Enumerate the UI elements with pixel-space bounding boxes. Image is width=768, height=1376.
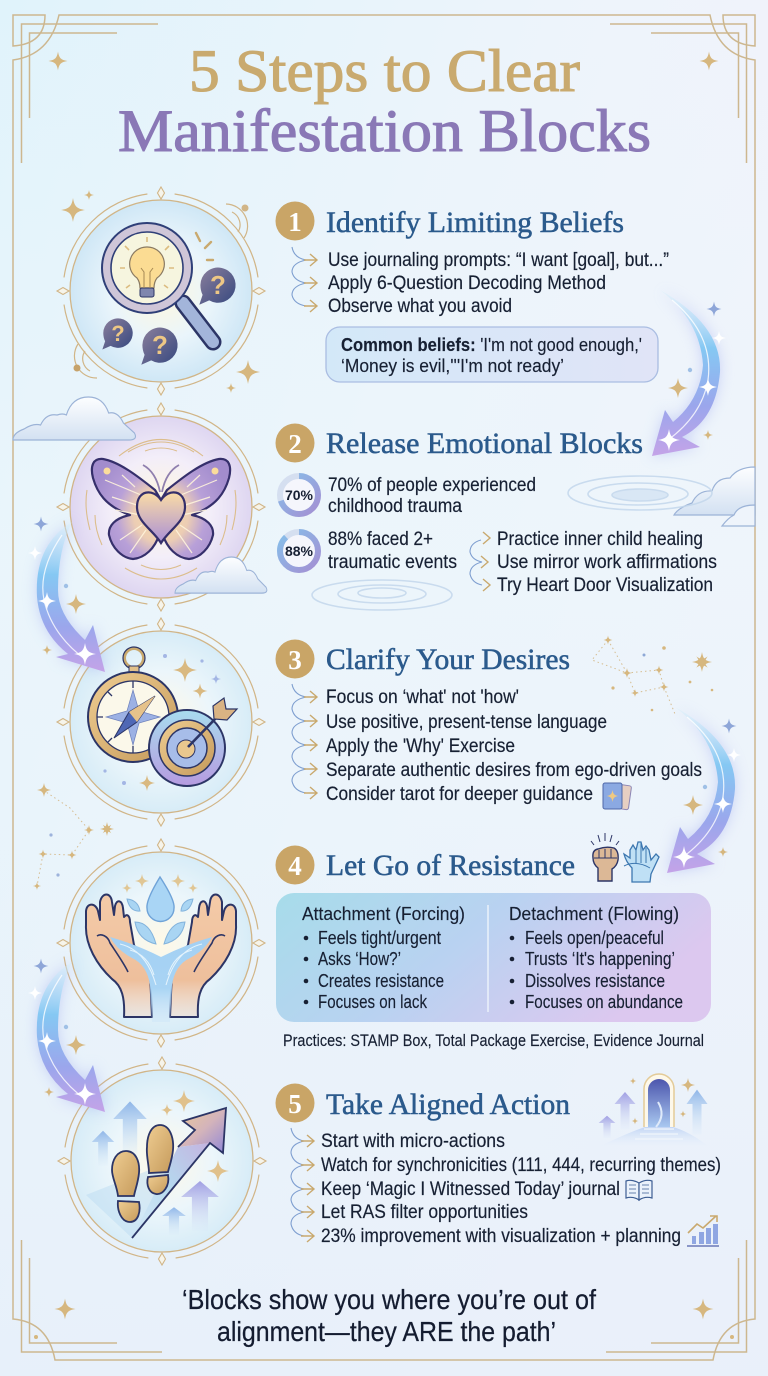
flow arrow: step 3 to 4 — [667, 707, 741, 873]
stat: 70% text: 70% of people experienced — [328, 475, 536, 496]
column: attachment: Focuses on lack — [318, 992, 428, 1012]
illustration: compass and target — [57, 618, 265, 826]
column: attachment: Creates resistance — [318, 971, 444, 991]
connector — [292, 247, 317, 312]
illustration: open hands with water — [57, 839, 265, 1047]
bullet list: Start with micro-actions — [321, 1131, 505, 1152]
badge 4: 4 — [288, 851, 302, 881]
icon: cloud right small — [722, 505, 755, 526]
heading: Take Aligned Action — [326, 1088, 570, 1121]
callout: common beliefs: ‘Money is evil,'''I'm not ready’ — [341, 356, 564, 376]
icon: open hand — [624, 842, 659, 882]
icon: question bubble bottom — [141, 328, 178, 365]
flow arrow: step 2 to 3 — [28, 516, 105, 672]
closing quote: ‘Blocks show you where you’re out of — [182, 1284, 596, 1315]
closing quote — [182, 1284, 596, 1347]
icon: antennae — [143, 465, 179, 492]
clouds over illustrations — [13, 397, 755, 593]
connector — [291, 1128, 314, 1242]
practice list: Use mirror work affirmations — [497, 552, 717, 573]
column: attachment: Asks ‘How?’ — [318, 949, 401, 969]
panel: step 4 — [276, 833, 711, 1050]
comparison panel — [276, 893, 711, 1022]
badge 4 — [276, 846, 314, 884]
bullet list — [321, 1131, 721, 1247]
heading: Identify Limiting Beliefs — [326, 206, 624, 239]
icon: tarot cards — [603, 783, 632, 810]
icon: clenched fist — [591, 833, 619, 881]
bullet list: Consider tarot for deeper guidance — [326, 784, 593, 805]
icon: left hand — [86, 894, 152, 1017]
icon: thumbs — [97, 935, 225, 972]
icon: butterfly left wings — [92, 459, 161, 559]
icon: heart — [137, 492, 185, 543]
constellation upper right — [592, 636, 713, 714]
bullet list: Apply the 'Why' Exercise — [326, 736, 515, 757]
practice list — [497, 529, 717, 596]
icon: droplets — [127, 899, 193, 944]
icon: magnifier handle highlight — [183, 303, 213, 342]
connector — [292, 684, 317, 799]
column: attachment: Attachment (Forcing) — [302, 904, 465, 924]
panel: step 3 — [276, 640, 702, 810]
icon: right hand — [170, 894, 236, 1017]
icon: magnifier lens — [111, 232, 183, 304]
bullet list: 23% improvement with visualization + planning — [321, 1226, 681, 1247]
icon: lightbulb — [120, 237, 174, 297]
icon: cloud right — [674, 467, 755, 515]
bullet list: Apply 6-Question Decoding Method — [328, 273, 606, 294]
bullet list: Observe what you avoid — [328, 296, 512, 317]
icon: rising arrow outline — [132, 1108, 226, 1238]
column: attachment: Feels tight/urgent — [318, 928, 441, 948]
stat: 88% text: traumatic events — [328, 552, 457, 573]
badge 5 — [276, 1084, 314, 1122]
bullet list — [328, 250, 669, 317]
icon: flowing water — [110, 937, 212, 1022]
water ripples right — [568, 476, 712, 510]
bullet list: Watch for synchronicities (111, 444, recurring themes) — [321, 1155, 721, 1176]
donut: 88% — [280, 532, 318, 570]
column: detachment: Focuses on abundance — [525, 992, 683, 1012]
stat: 70% text: childhood trauma — [328, 496, 462, 517]
illustration: butterfly with heart — [57, 403, 265, 611]
energy arcs — [86, 440, 236, 579]
stat: 70% text — [328, 475, 536, 517]
practice list: Try Heart Door Visualization — [497, 575, 713, 596]
heading: Release Emotional Blocks — [326, 427, 643, 460]
title: Manifestation Blocks — [118, 98, 651, 164]
callout: common beliefs: Common beliefs: 'I'm not good enough,' — [341, 335, 642, 355]
illustration: footsteps and rising arrow — [58, 1057, 266, 1265]
practices line: Practices: STAMP Box, Total Package Exercise, Evidence Journal — [283, 1032, 704, 1050]
icon: water highlights — [120, 944, 202, 985]
icon: footprint one — [112, 1151, 140, 1222]
practice list: Practice inner child healing — [497, 529, 703, 550]
icon: sparkle lines — [196, 233, 213, 260]
illustration: magnifier with lightbulb — [57, 187, 265, 395]
column: detachment: Feels open/peaceful — [525, 928, 664, 948]
panel: step 5 — [276, 1074, 721, 1247]
icon: rising arrow head — [178, 1108, 226, 1153]
icon: magnifier rim — [102, 223, 192, 313]
icon: footprint two — [147, 1125, 173, 1194]
bullet list: Use journaling prompts: “I want [goal], but...” — [328, 250, 669, 271]
title: 5 Steps to Clear — [189, 38, 580, 104]
icon: question bubble bottom: ? — [152, 330, 168, 360]
icon: butterfly right wings — [161, 459, 230, 559]
column: detachment — [509, 904, 683, 1012]
badge 1: 1 — [288, 207, 302, 237]
column: attachment — [302, 904, 465, 1012]
icon: cloud lower butterfly — [175, 557, 267, 593]
flow arrow: step 4 to 5 — [28, 958, 105, 1112]
column: detachment: Detachment (Flowing) — [509, 904, 679, 924]
icon: wing spots — [104, 468, 218, 474]
bullet list: Keep ‘Magic I Witnessed Today’ journal — [321, 1179, 620, 1200]
icon: target — [149, 698, 237, 786]
column: detachment: Trusts ‘It's happening’ — [525, 949, 675, 969]
panel: step 2 — [276, 424, 717, 596]
badge 2 — [276, 424, 314, 462]
water ripples bottom — [312, 580, 452, 610]
title — [118, 38, 651, 164]
icon: cloud upper left — [13, 397, 135, 440]
badge 3 — [276, 640, 314, 678]
stat: 88% text — [328, 529, 457, 573]
bullet list: Focus on ‘what' not 'how' — [326, 687, 519, 708]
bullet list — [326, 687, 702, 805]
heading: Let Go of Resistance — [326, 849, 575, 882]
flow arrow: step 1 to 2 — [652, 290, 726, 456]
donut: 70%: 70% — [285, 487, 314, 503]
light path — [86, 1150, 200, 1238]
icon: question bubble right: ? — [210, 270, 226, 300]
icon: water drop — [147, 877, 174, 922]
badge 5: 5 — [288, 1089, 302, 1119]
donut: 88%: 88% — [285, 543, 314, 559]
constellation left — [33, 783, 115, 890]
panel: step 1 — [276, 202, 669, 382]
icon: glowing doorway — [599, 1074, 708, 1146]
icon: compass — [88, 647, 178, 762]
closing quote: alignment—they ARE the path’ — [217, 1316, 556, 1347]
icon: wing rays — [105, 475, 217, 553]
column: detachment: Dissolves resistance — [525, 971, 665, 991]
bullet list: Let RAS filter opportunities — [321, 1202, 528, 1223]
callout: common beliefs — [326, 327, 658, 382]
badge 3: 3 — [288, 645, 302, 675]
icon: magnifier handle — [183, 303, 213, 342]
badge 2: 2 — [288, 429, 302, 459]
badge 1 — [276, 202, 314, 240]
heading: Clarify Your Desires — [326, 643, 570, 676]
icon: growth chart — [687, 1216, 719, 1246]
icon: open book — [626, 1180, 652, 1200]
stat: 88% text: 88% faced 2+ — [328, 529, 433, 550]
donut: 70% — [280, 476, 318, 514]
icon: rising arrow tail — [132, 1143, 210, 1238]
icon: question bubble right — [199, 268, 236, 305]
icon: question bubble left — [102, 318, 133, 350]
bullet list: Use positive, present-tense language — [326, 712, 607, 733]
icon: question bubble left: ? — [111, 321, 125, 346]
connector — [470, 532, 490, 591]
bullet list: Separate authentic desires from ego-driven goals — [326, 760, 702, 781]
